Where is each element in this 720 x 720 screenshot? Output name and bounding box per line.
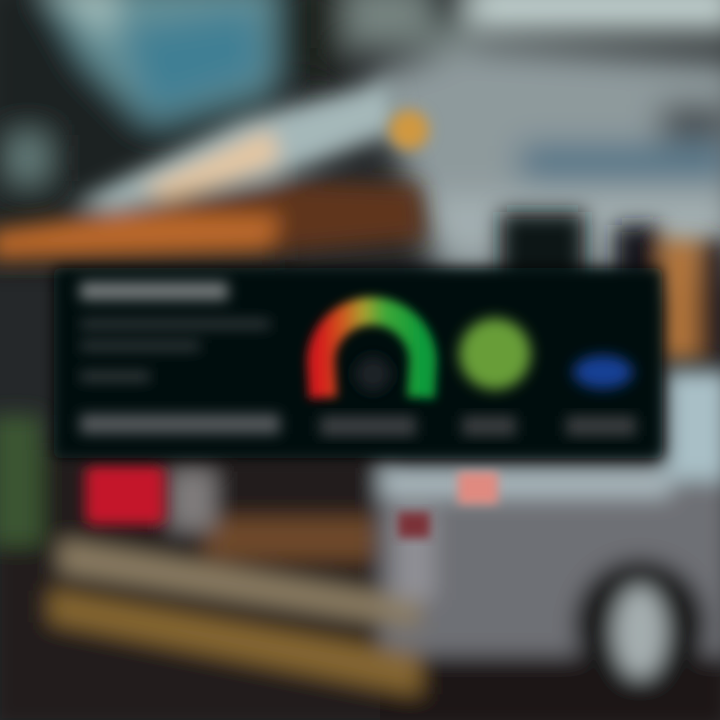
icon: blue status <box>566 355 636 436</box>
gauge chart <box>320 311 423 436</box>
text block: vehicle details <box>80 282 280 434</box>
roof stripe <box>0 80 720 360</box>
green status label <box>462 416 516 436</box>
panel: dark status overlay <box>54 268 662 458</box>
lower vehicle <box>0 370 720 720</box>
icon: green status circle <box>459 318 531 436</box>
gauge label <box>320 416 416 436</box>
blue status label <box>566 416 636 436</box>
